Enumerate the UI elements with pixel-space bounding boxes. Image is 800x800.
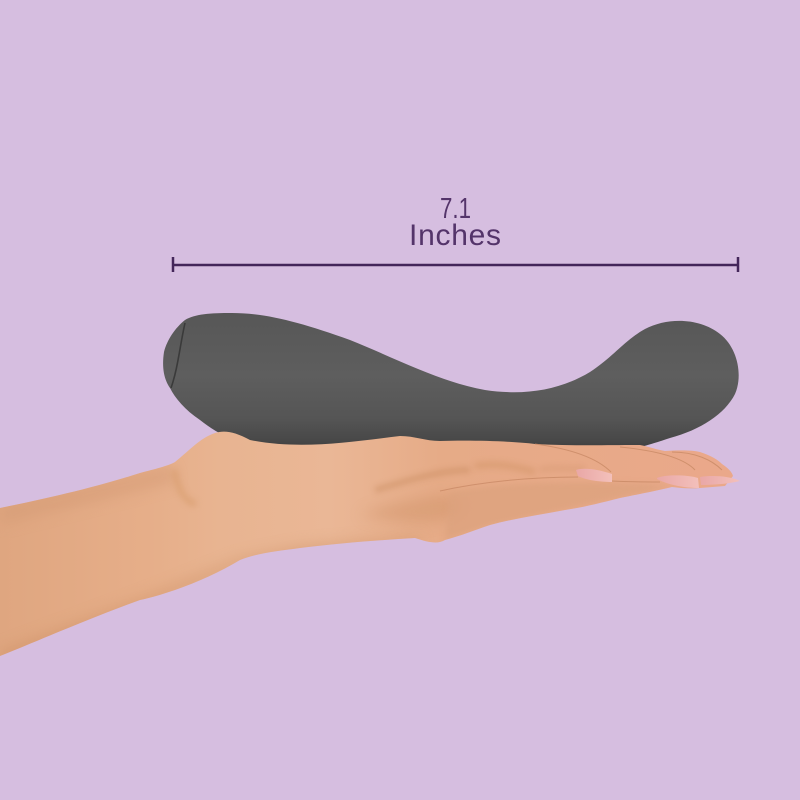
- fingernail: [700, 476, 740, 485]
- arm and palm: [0, 432, 733, 656]
- measurement label: Inches: [409, 219, 501, 252]
- skin shading: [0, 465, 670, 670]
- measurement label: [409, 193, 501, 252]
- fingernail: [576, 469, 612, 482]
- infographic canvas: [0, 198, 740, 656]
- dimension line: [173, 257, 738, 272]
- end cap seam: [171, 323, 185, 388]
- product silhouette: [163, 313, 739, 453]
- fingernail: [657, 475, 699, 488]
- measurement label: 7.1: [440, 193, 471, 225]
- finger outlines: [440, 444, 722, 491]
- hand and arm: [0, 432, 740, 670]
